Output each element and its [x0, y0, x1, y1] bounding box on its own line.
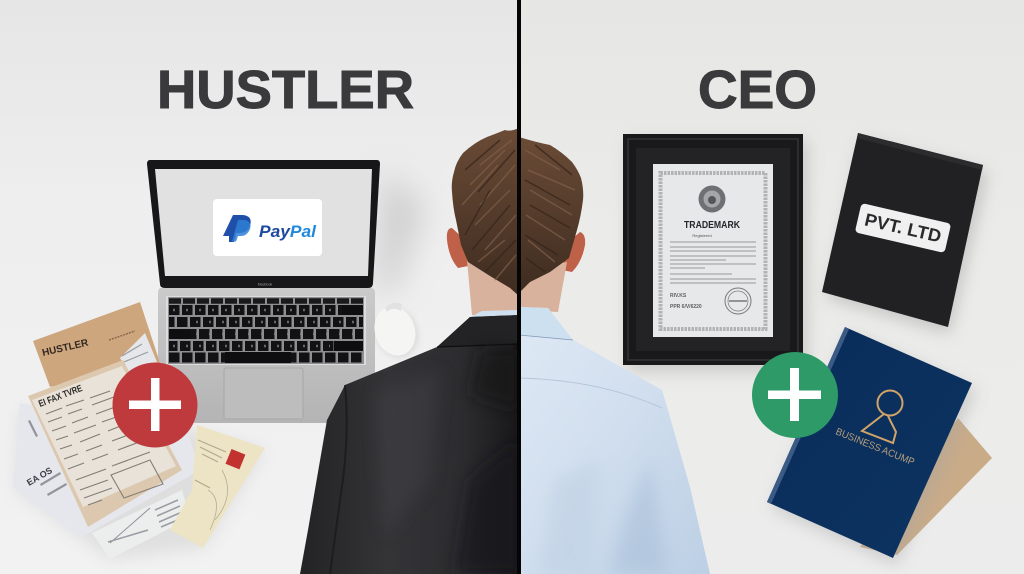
book title: BUSINESS ACUMP — [834, 427, 916, 468]
title: hustler: HUSTLER — [157, 60, 414, 120]
plus icon — [129, 378, 181, 431]
shirt — [519, 307, 710, 574]
laptop base — [158, 288, 375, 423]
collar left — [472, 310, 519, 318]
green plus badge — [752, 352, 838, 438]
laptop lid — [147, 160, 380, 288]
paper pile — [13, 302, 265, 560]
yellow paper — [170, 425, 265, 548]
left sheet print — [25, 420, 67, 496]
shirt collar — [519, 307, 573, 340]
red plus badge — [112, 362, 198, 448]
framed certificate: Registered — [692, 233, 712, 238]
laptop — [147, 160, 380, 423]
hair right — [519, 137, 583, 293]
neck left — [466, 250, 520, 315]
black book — [822, 133, 988, 334]
tan folder behind blue book — [860, 418, 992, 555]
vertical divider — [517, 0, 521, 574]
man: hustler half — [300, 128, 520, 574]
paypal mark — [223, 215, 251, 242]
tax form: EI FAX TVRE — [37, 383, 84, 410]
tan folder — [33, 302, 160, 387]
paypal wordmark: PayPal — [259, 222, 317, 241]
keyboard — [166, 296, 366, 365]
stamp — [725, 288, 751, 314]
hinge label: MacBook — [258, 282, 273, 286]
tax form — [28, 360, 182, 527]
man: ceo half — [519, 137, 710, 574]
certificate paper — [653, 164, 773, 337]
label: pvt ltd — [855, 203, 951, 253]
neck right — [519, 262, 567, 312]
certificate body text — [670, 242, 756, 283]
laptop shadow — [376, 170, 425, 300]
mouse — [368, 301, 425, 363]
paypal card — [213, 199, 322, 256]
framed certificate: PPR 6/V/6220 — [670, 304, 702, 310]
plus icon — [768, 368, 821, 421]
certificate footer: RIV.KS — [670, 293, 687, 299]
laptop screen — [155, 169, 372, 276]
blue book — [767, 327, 976, 565]
shadow under pile — [15, 410, 265, 560]
shirt folds — [519, 378, 662, 408]
white sheet back left — [13, 403, 200, 538]
ear left — [447, 228, 468, 268]
hair left — [452, 128, 519, 296]
ear right — [562, 232, 585, 272]
framed certificate — [623, 134, 808, 372]
title: ceo: CEO — [698, 60, 817, 120]
left sheet print: EA OS — [25, 465, 54, 488]
certificate heading: TRADEMARK — [684, 219, 740, 231]
trackpad — [224, 368, 303, 419]
label: pvt ltd: PVT. LTD — [863, 209, 943, 247]
jacket — [300, 315, 519, 574]
frame — [623, 134, 803, 365]
tan folder: HUSTLER — [41, 337, 90, 359]
lower chart sheet — [92, 490, 190, 559]
gold icon — [862, 390, 902, 443]
seal — [698, 186, 726, 212]
